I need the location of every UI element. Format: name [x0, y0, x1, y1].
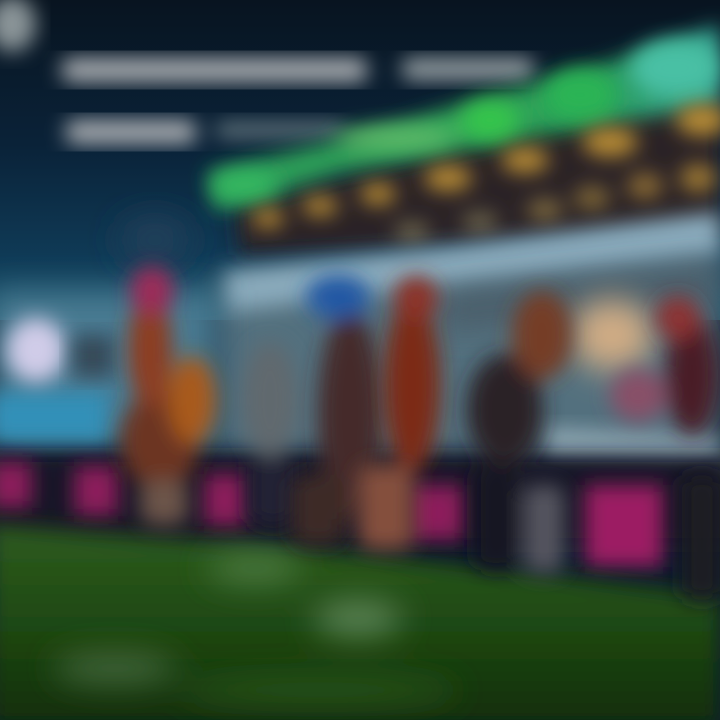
horse 1 — [120, 266, 216, 525]
sky background — [0, 0, 720, 320]
dark band under rail — [440, 265, 720, 330]
grandstand green roof — [208, 25, 720, 212]
warm glow right — [570, 299, 654, 371]
horse 4 — [358, 276, 440, 550]
lower right pale rail — [545, 428, 720, 472]
horse 3 with blue jockey — [292, 275, 382, 545]
left stand — [0, 290, 220, 450]
pale rail — [225, 212, 720, 312]
grass — [0, 525, 720, 720]
title line 2 — [66, 120, 345, 144]
crowd lights — [252, 104, 720, 242]
dark barrier strip — [0, 455, 720, 545]
horse 6 — [610, 296, 720, 600]
dark left block — [72, 335, 114, 377]
stand middle band — [215, 235, 720, 465]
logo mark — [0, 0, 36, 52]
magenta banners — [0, 462, 663, 567]
left blue boards — [0, 392, 108, 442]
grass highlights — [53, 553, 460, 702]
horse 5 — [467, 291, 572, 573]
horse 2 — [242, 342, 298, 525]
title line 1 — [62, 58, 534, 82]
grandstand dark interior — [235, 85, 720, 255]
roof highlights — [211, 40, 719, 200]
dim shape above stand — [119, 216, 191, 264]
spot light — [6, 318, 66, 382]
